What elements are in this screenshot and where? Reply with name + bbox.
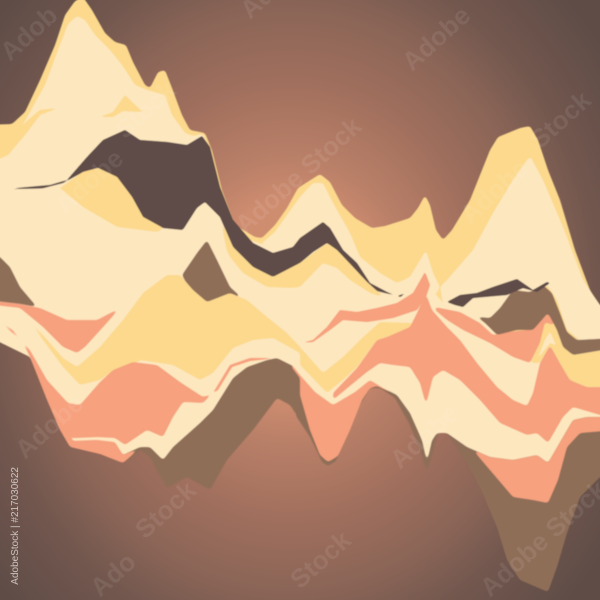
back brown layer: center shadow — [296, 370, 440, 472]
watermarks: Stock — [109, 74, 182, 144]
small yellow peak — [100, 95, 143, 117]
stock id label: AdobeStock | #217030622 — [10, 467, 21, 585]
yellow top silhouette — [0, 0, 600, 340]
dark right streak — [447, 279, 550, 307]
brown diamond — [182, 240, 240, 306]
watermarks: Adobe — [454, 153, 534, 229]
cream middle mountain — [262, 183, 440, 320]
yellow center band — [23, 275, 413, 393]
back brown layer: left silhouette — [127, 340, 302, 490]
back brown layer: right silhouette — [437, 400, 600, 592]
thin salmon line — [213, 358, 277, 393]
cream left mountain — [0, 16, 300, 300]
salmon right lower band — [447, 417, 600, 503]
central salmon band — [333, 294, 600, 443]
watermarks: Adobe — [9, 388, 89, 464]
brown right band — [467, 285, 600, 355]
watermarks: Adobe — [396, 0, 476, 76]
salmon tip — [290, 365, 410, 462]
brown far-left wedge — [0, 250, 37, 307]
watermarks: Adobe — [384, 398, 464, 474]
salmon streak left — [0, 300, 120, 353]
yellow under dark band left — [60, 168, 163, 232]
cream sliver in right band — [538, 332, 556, 358]
salmon upper-right strip — [435, 307, 555, 363]
yellow under dark band right — [220, 217, 385, 296]
watermarks: Stock — [284, 524, 357, 594]
yellow streak on left mountain — [0, 108, 58, 165]
cream right mountain — [440, 156, 600, 340]
big cream base body — [0, 188, 600, 463]
watermarks: Stock — [524, 84, 597, 154]
salmon curved streak — [300, 272, 430, 343]
salmon left large lobe — [0, 310, 213, 463]
yellow right band — [530, 322, 600, 387]
watermarks: Adobe Stock — [229, 110, 368, 239]
watermarks: Stock — [129, 474, 202, 544]
watermarks: Adobe — [49, 143, 129, 219]
dark band — [5, 130, 410, 297]
